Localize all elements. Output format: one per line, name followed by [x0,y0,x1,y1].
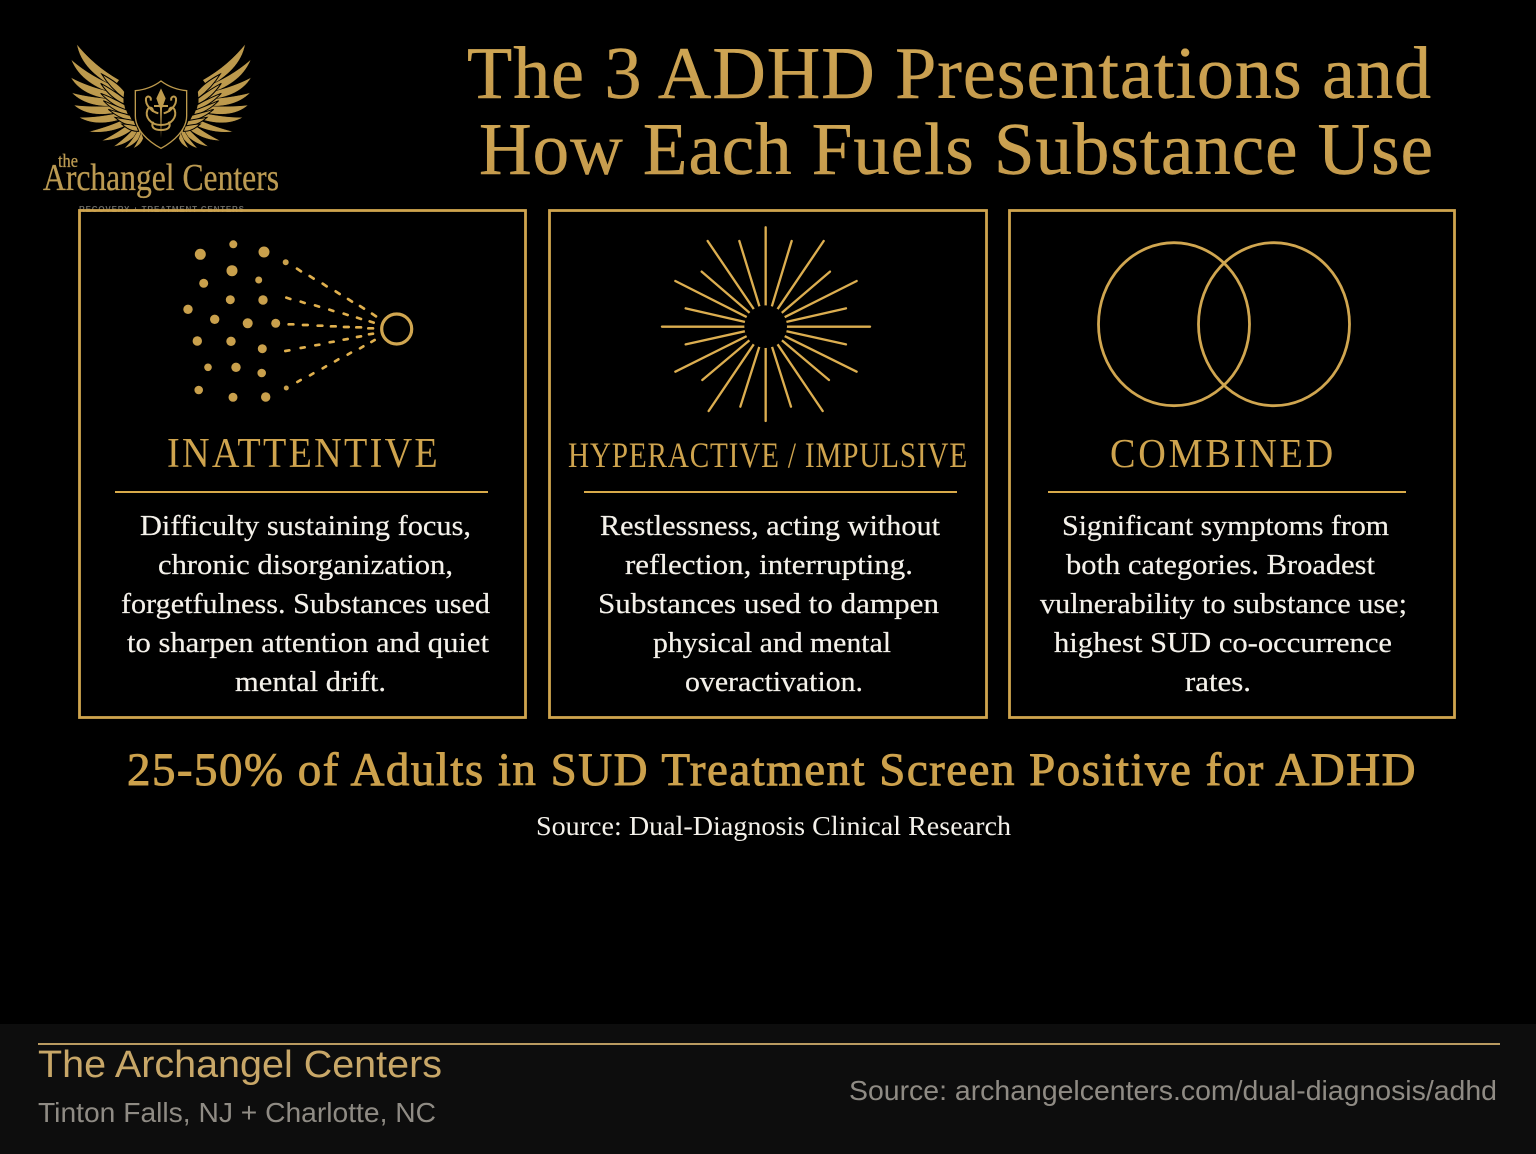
body text: Restlessness, acting without [600,510,940,542]
icon: scattered dots from a ring [183,240,412,402]
body text [598,510,940,698]
body text: overactivation. [685,666,863,698]
body text: highest SUD co-occurrence [1054,627,1392,659]
body text: forgetfulness. Substances used [121,588,491,620]
body text: rates. [1185,666,1251,698]
body text: physical and mental [653,627,891,659]
heading: HYPERACTIVE / IMPULSIVE [568,435,968,475]
body text: vulnerability to substance use; [1040,588,1407,620]
body text: mental drift. [235,666,386,698]
panel: combined [1010,210,1454,718]
title: The 3 ADHD Presentations and [467,33,1432,115]
footer locations: Tinton Falls, NJ + Charlotte, NC [38,1097,436,1128]
icon: overlapping circles [1098,243,1350,406]
body text: chronic disorganization, [158,549,453,581]
source line: Source: Dual-Diagnosis Clinical Research [536,811,1012,841]
logo wordmark: the [58,151,78,172]
heading: COMBINED [1110,430,1336,476]
panel: inattentive [80,210,526,718]
body text: to sharpen attention and quiet [127,627,489,659]
footer brand name: The Archangel Centers [38,1044,442,1086]
statistic callout: 25-50% of Adults in SUD Treatment Screen Positive for ADHD [127,744,1417,796]
icon: winged shield [71,44,251,148]
body text [121,510,491,698]
icon: starburst [662,227,870,421]
body text: Significant symptoms from [1062,510,1389,542]
logo tagline: RECOVERY + TREATMENT CENTERS [79,205,245,214]
logo: The Archangel Centers [43,44,279,214]
footer source: Source: archangelcenters.com/dual-diagnosis/adhd [849,1075,1497,1106]
title: How Each Fuels Substance Use [479,109,1434,191]
body text [1040,510,1407,698]
body text: both categories. Broadest [1066,549,1375,581]
logo wordmark: Archangel Centers [43,157,279,199]
heading: INATTENTIVE [167,431,440,477]
body text: Substances used to dampen [598,588,940,620]
footer [0,1024,1536,1154]
body text: Difficulty sustaining focus, [140,510,471,542]
panel: hyperactive / impulsive [550,210,986,718]
title [467,33,1434,191]
body text: reflection, interrupting. [625,549,913,581]
